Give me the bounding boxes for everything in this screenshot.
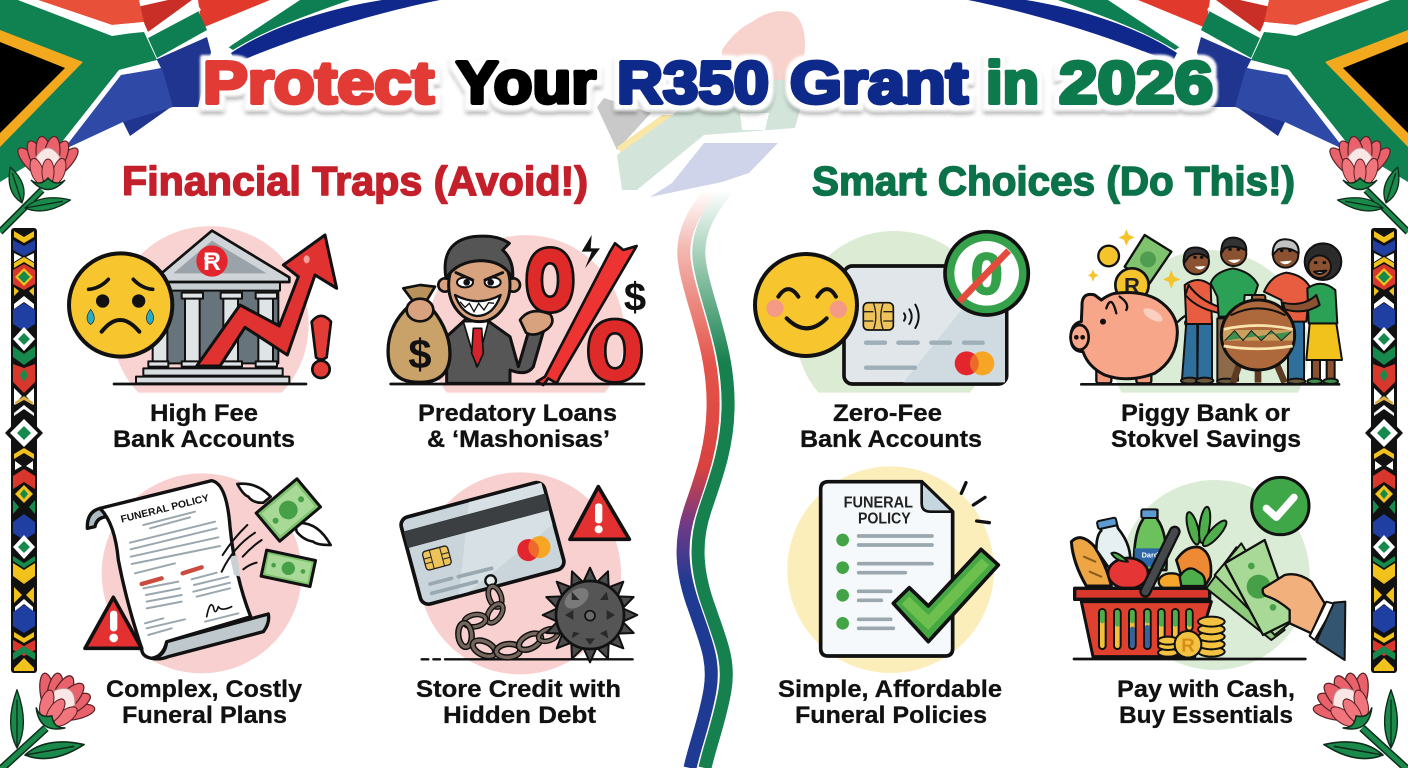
icon: upper zero of percent [527,247,573,313]
title: Your [456,50,596,116]
panel: pay with cash [1071,477,1345,729]
person: right figure [1283,243,1342,384]
person: second figure [1211,238,1258,384]
label: funeral plans: Funeral Plans [122,702,287,729]
flag: right corner [968,0,1408,182]
panel: piggy bank or stokvel [1071,229,1342,453]
label: hidden debt: Hidden Debt [443,702,596,729]
label: bank accounts: Bank Accounts [113,426,295,453]
icon: funeral policy scroll with flying money and warning [85,473,331,673]
protea: top left [0,135,82,232]
label: funeral policies: Funeral Policies [795,702,987,729]
protea: bottom left [0,659,107,768]
person: third figure [1264,239,1310,384]
label: bank accounts: Bank Accounts [800,426,982,453]
label: predatory loans: Predatory Loans [418,400,617,427]
icon: simple policy document with check mark: FUNERAL [844,494,913,511]
panel: complex funeral plans [85,473,331,729]
icon: loan shark with money bag and percent sign: $ [408,330,432,377]
icon: lower zero of percent [588,319,642,382]
label: stokvel savings: Stokvel Savings [1111,426,1301,453]
label: high fee: High Fee [150,400,258,427]
label: zero-fee: Zero-Fee [833,400,942,427]
icon: grocery basket paid with cash [1071,477,1345,670]
panel: predatory loans [388,235,646,453]
faded South Africa map [597,11,805,197]
icon: loan shark with money bag and percent sign: $ [624,276,646,320]
centre ribbon divider [683,190,728,768]
icon: grocery basket paid with cash: Dard [1142,550,1158,559]
label: store credit with: Store Credit with [416,676,621,703]
panel: store credit [399,472,637,729]
icon: simple policy document with check mark: POLICY [858,510,911,527]
icon: smiling face, bank card and crossed zero: 0 [970,242,1003,307]
icon: grocery basket paid with cash: R [1181,635,1195,656]
panel: simple funeral policies [778,466,1002,729]
heading: smart choices: Smart Choices (Do This!) [812,158,1295,204]
beadwork strip: left [5,228,43,673]
icon: piggy bank with coins and stokvel group [1071,229,1342,393]
icon: smiling face, bank card and crossed zero [755,231,1028,393]
title: in [986,50,1039,116]
protea: bottom right [1301,659,1408,768]
label: buy essentials: Buy Essentials [1119,702,1293,729]
beadwork strip: right [1365,228,1403,673]
icon: funeral policy scroll with flying money and warning: FUNERAL POLICY [120,493,211,526]
label: pay with cash,: Pay with Cash, [1117,676,1295,703]
title: R350 [617,50,769,116]
icon: bank with sad face and rising arrow [69,226,337,393]
label: piggy bank or: Piggy Bank or [1121,400,1290,427]
icon: loan shark with money bag and percent sign [388,235,646,393]
label: mashonisas: & ‘Mashonisas’ [427,426,610,453]
flag: left corner [0,0,440,182]
label: simple, affordable: Simple, Affordable [778,676,1002,703]
heading: financial traps: Financial Traps (Avoid!) [122,158,588,204]
icon: bank with sad face and rising arrow: R [203,249,221,276]
icon: store card chained to spiked ball [399,472,637,674]
panel: high fee bank accounts [69,226,337,453]
icon: simple policy document with check mark [787,466,998,673]
title: 2026 [1059,50,1213,116]
title: Protect [203,50,434,116]
title [203,50,1213,116]
person: left figure [1181,248,1228,384]
protea: top right [1326,135,1408,232]
panel: zero-fee bank accounts [755,231,1028,453]
icon: piggy bank with coins and stokvel group: R [1124,273,1140,298]
title: Grant [790,50,968,116]
label: complex, costly: Complex, Costly [106,676,302,703]
